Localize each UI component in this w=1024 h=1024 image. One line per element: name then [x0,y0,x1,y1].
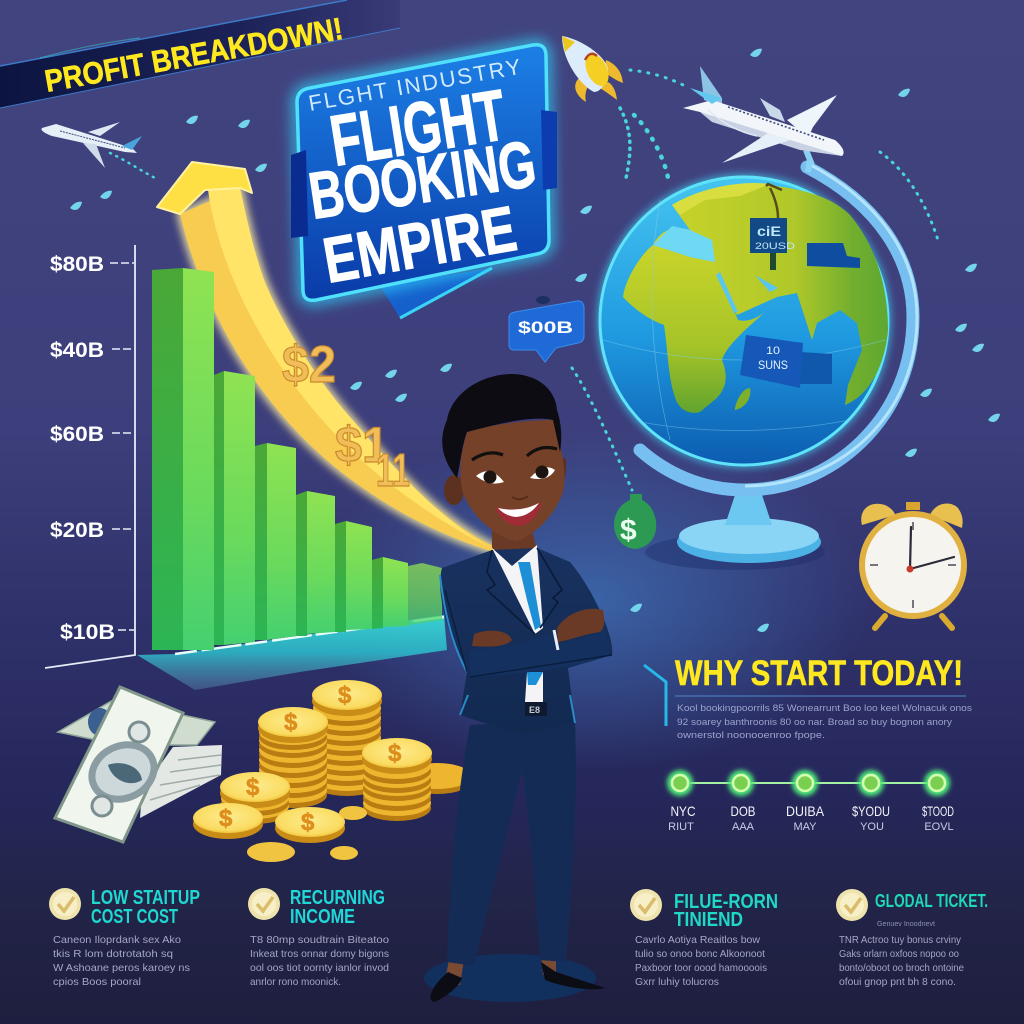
bar chart [45,245,447,690]
feature heading [91,887,200,928]
chart floor [137,615,447,690]
globe: SUNS [758,358,788,372]
section body: 92 soarey banthroonis 80 oo nar. Broad so buy bognon anory [677,717,952,728]
banner heading: PROFIT BREAKDOWN! [42,11,345,99]
smile [495,502,542,526]
globe base [645,534,825,570]
feature body: tkis R lom dotrotatoh sq [53,948,173,960]
timeline labels: $YODU [852,803,890,819]
feature body: Gaks orlarn oxfoos nopoo oo [839,948,959,960]
feature: fluid workflow [630,889,778,988]
jacket edge accent [440,575,575,723]
coin dollar marks: $ [301,809,315,836]
title panel [291,45,557,318]
feature body: TNR Actroo tuy bonus crviny [839,934,962,946]
coin dollar marks: $ [338,682,352,709]
section body [677,703,972,741]
section: why start today [644,654,972,741]
feature body: anrlor rono moonick. [250,976,341,988]
feature body [839,934,964,988]
face [460,420,565,541]
feature body [250,934,389,988]
globe sphere [597,174,891,468]
gold coin stacks [193,680,471,862]
arrow dollar labels: 11 [376,444,410,496]
small airplane [41,122,142,168]
arrow dollar labels: $1 [335,417,389,473]
feature heading: TINIEND [674,909,743,931]
globe: 10 [766,345,780,357]
chart axes [45,245,135,668]
feature body: bonto/oboot oo broch ontoine [839,962,964,974]
bar chart: $60B [50,423,104,446]
feature body: W Ashoane peros karoey ns [53,962,190,974]
feature body: cpios Boos pooral [53,976,141,988]
check icon [836,889,868,921]
coin dollar marks: $ [284,709,298,736]
globe land [603,183,888,440]
coin dollar marks: $ [219,805,233,832]
large airplane [683,66,844,163]
bar chart: $20B [50,519,104,542]
alarm clock [859,502,967,628]
coin dollar marks: $ [246,774,260,801]
arrow dollar labels: $2 [282,336,336,394]
feature heading [674,891,778,931]
timeline labels: DUIBA [786,803,825,819]
route timeline: MAY [793,821,817,833]
route timeline: YOU [860,821,884,833]
feature body: Inkeat tros onnar domy bigons [250,948,389,960]
feature heading: INCOME [290,906,355,928]
title line 2: BOOKING [304,126,541,233]
timeline labels: $TOOD [922,803,954,819]
route timeline: AAA [732,821,755,833]
shoes [430,972,462,1002]
timeline labels: NYC [670,803,696,819]
globe [597,150,917,570]
businesswoman character: E8 [529,705,540,715]
bars [152,268,442,650]
feature body: ofoui gnop pnt bh 8 cono. [839,976,956,988]
arrow: profit trend [157,162,493,552]
feature: low startup cost [49,887,200,988]
title line 1: FLIGHT [325,75,511,182]
title line 3: EMPIRE [318,192,521,297]
coin dollar marks: $ [388,740,402,767]
timeline labels: DOB [730,803,756,819]
feature heading: COST COST [91,906,178,928]
section heading: WHY START TODAY! [675,654,963,693]
eyes [472,448,557,484]
feature heading [290,887,385,928]
feature body: Caneon Iloprdank sex Ako [53,934,181,946]
check icon [49,888,81,920]
bar chart: $40B [50,339,104,362]
crossed arms [470,590,612,677]
feature body [635,934,767,988]
axis labels: $80B [50,253,104,276]
bar chart: $10B [60,621,115,644]
feature: global ticket [836,889,988,988]
route timeline: EOVL [924,821,954,833]
feature heading: RECURNING [290,887,385,909]
money bag: $ [620,514,637,547]
feature body: Paxboor toor oood hamoooois [635,962,767,974]
price tag: $00B [509,296,584,362]
feature body: Gxrr luhiy tolucros [635,976,719,988]
feature heading: LOW STAITUP [91,887,200,909]
shirt and tie [492,545,543,634]
cash stack [55,687,222,842]
feature body: T8 80mp soudtrain Biteatoo [250,934,389,946]
feature small label: Genuev Inoodnevt [877,921,935,928]
feature body: ool oos tiot oornty ianlor invod [250,962,389,974]
route timeline [667,770,954,833]
left hand [472,631,512,647]
right hand [557,609,604,642]
flight dotted trails [110,70,938,490]
shadow [424,954,596,1002]
section body: Kool bookingpoorrils 85 Wonearrunt Boo loo keel Wolnacuk onos [677,703,972,714]
nose [512,496,528,499]
feature heading: FILUE-RORN [674,891,778,913]
bracket accent [644,665,666,726]
legs [447,720,576,966]
jacket [440,548,612,735]
rocket [562,36,623,102]
globe price tags [766,184,782,218]
hair [442,374,561,478]
feature body [53,934,190,988]
coin dollar marks [219,682,402,836]
route timeline: RIUT [668,821,694,833]
feature: recurring income [248,887,389,988]
section body: ownerstol noonooenroo fpope. [677,730,825,741]
ankles [444,955,556,985]
banner: profit breakdown [0,0,400,108]
price tag: $00B: $00B [518,318,573,337]
check icon [630,889,662,921]
floating leaves [70,49,1000,632]
globe: 20USD [755,241,796,251]
ears [444,475,464,505]
title subheading: FLGHT INDUSTRY [307,54,523,116]
arrow dollar labels [282,336,410,496]
globe: ciE [757,223,781,239]
lapels [487,548,562,634]
neck [492,522,537,568]
lower shirt [525,672,543,702]
money bag [614,494,656,549]
feature body: tulio so onoo bonc Alkoonoot [635,948,765,960]
timeline labels [670,803,954,819]
check icon [248,888,280,920]
feature heading: GLODAL TICKET. [875,891,988,911]
businesswoman character [424,374,612,1002]
feature body: Cavrlo Aotiya Reaitlos bow [635,934,760,946]
globe ring [640,167,913,490]
